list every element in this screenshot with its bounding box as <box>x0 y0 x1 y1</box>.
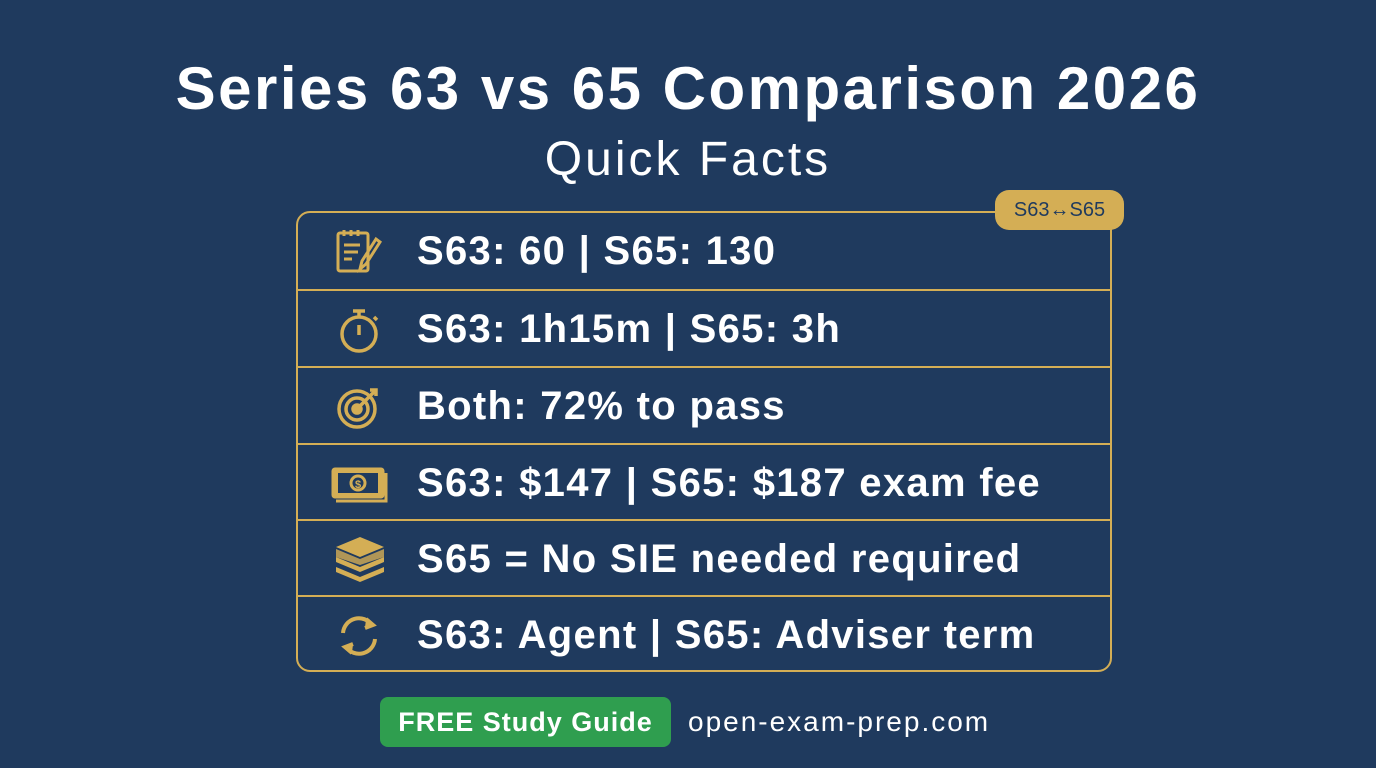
icon: books <box>336 537 384 582</box>
icon: money <box>332 468 388 502</box>
url text: open-exam-prep.com <box>688 706 990 737</box>
icon: money: $ <box>355 479 361 491</box>
row: time <box>298 289 1110 367</box>
row: prerequisite: S65 = No SIE needed required <box>417 537 1021 581</box>
badge: S63↔S65 <box>995 190 1124 230</box>
button: free study guide <box>380 697 671 747</box>
panel: quick facts table <box>296 211 1112 672</box>
row: terminology: S63: Agent | S65: Adviser term <box>417 613 1036 657</box>
icon: refresh arrows <box>341 616 377 656</box>
icon: target <box>337 388 378 429</box>
badge: S63↔S65: S63↔S65 <box>1014 199 1105 221</box>
row: prerequisite <box>298 519 1110 597</box>
icon: notepad <box>336 230 382 273</box>
row: time: S63: 1h15m | S65: 3h <box>417 307 841 351</box>
title: Series 63 vs 65 Comparison 2026 <box>176 55 1200 122</box>
row: passing score: Both: 72% to pass <box>417 384 786 428</box>
row: fee <box>298 443 1110 521</box>
row: passing score <box>298 366 1110 444</box>
row: terminology <box>298 595 1110 673</box>
button: free study guide: FREE Study Guide <box>398 707 653 737</box>
row: fee: S63: $147 | S65: $187 exam fee <box>417 461 1041 505</box>
icon: stopwatch <box>340 309 378 353</box>
subtitle: Quick Facts <box>545 133 831 186</box>
row: questions: S63: 60 | S65: 130 <box>417 229 776 273</box>
